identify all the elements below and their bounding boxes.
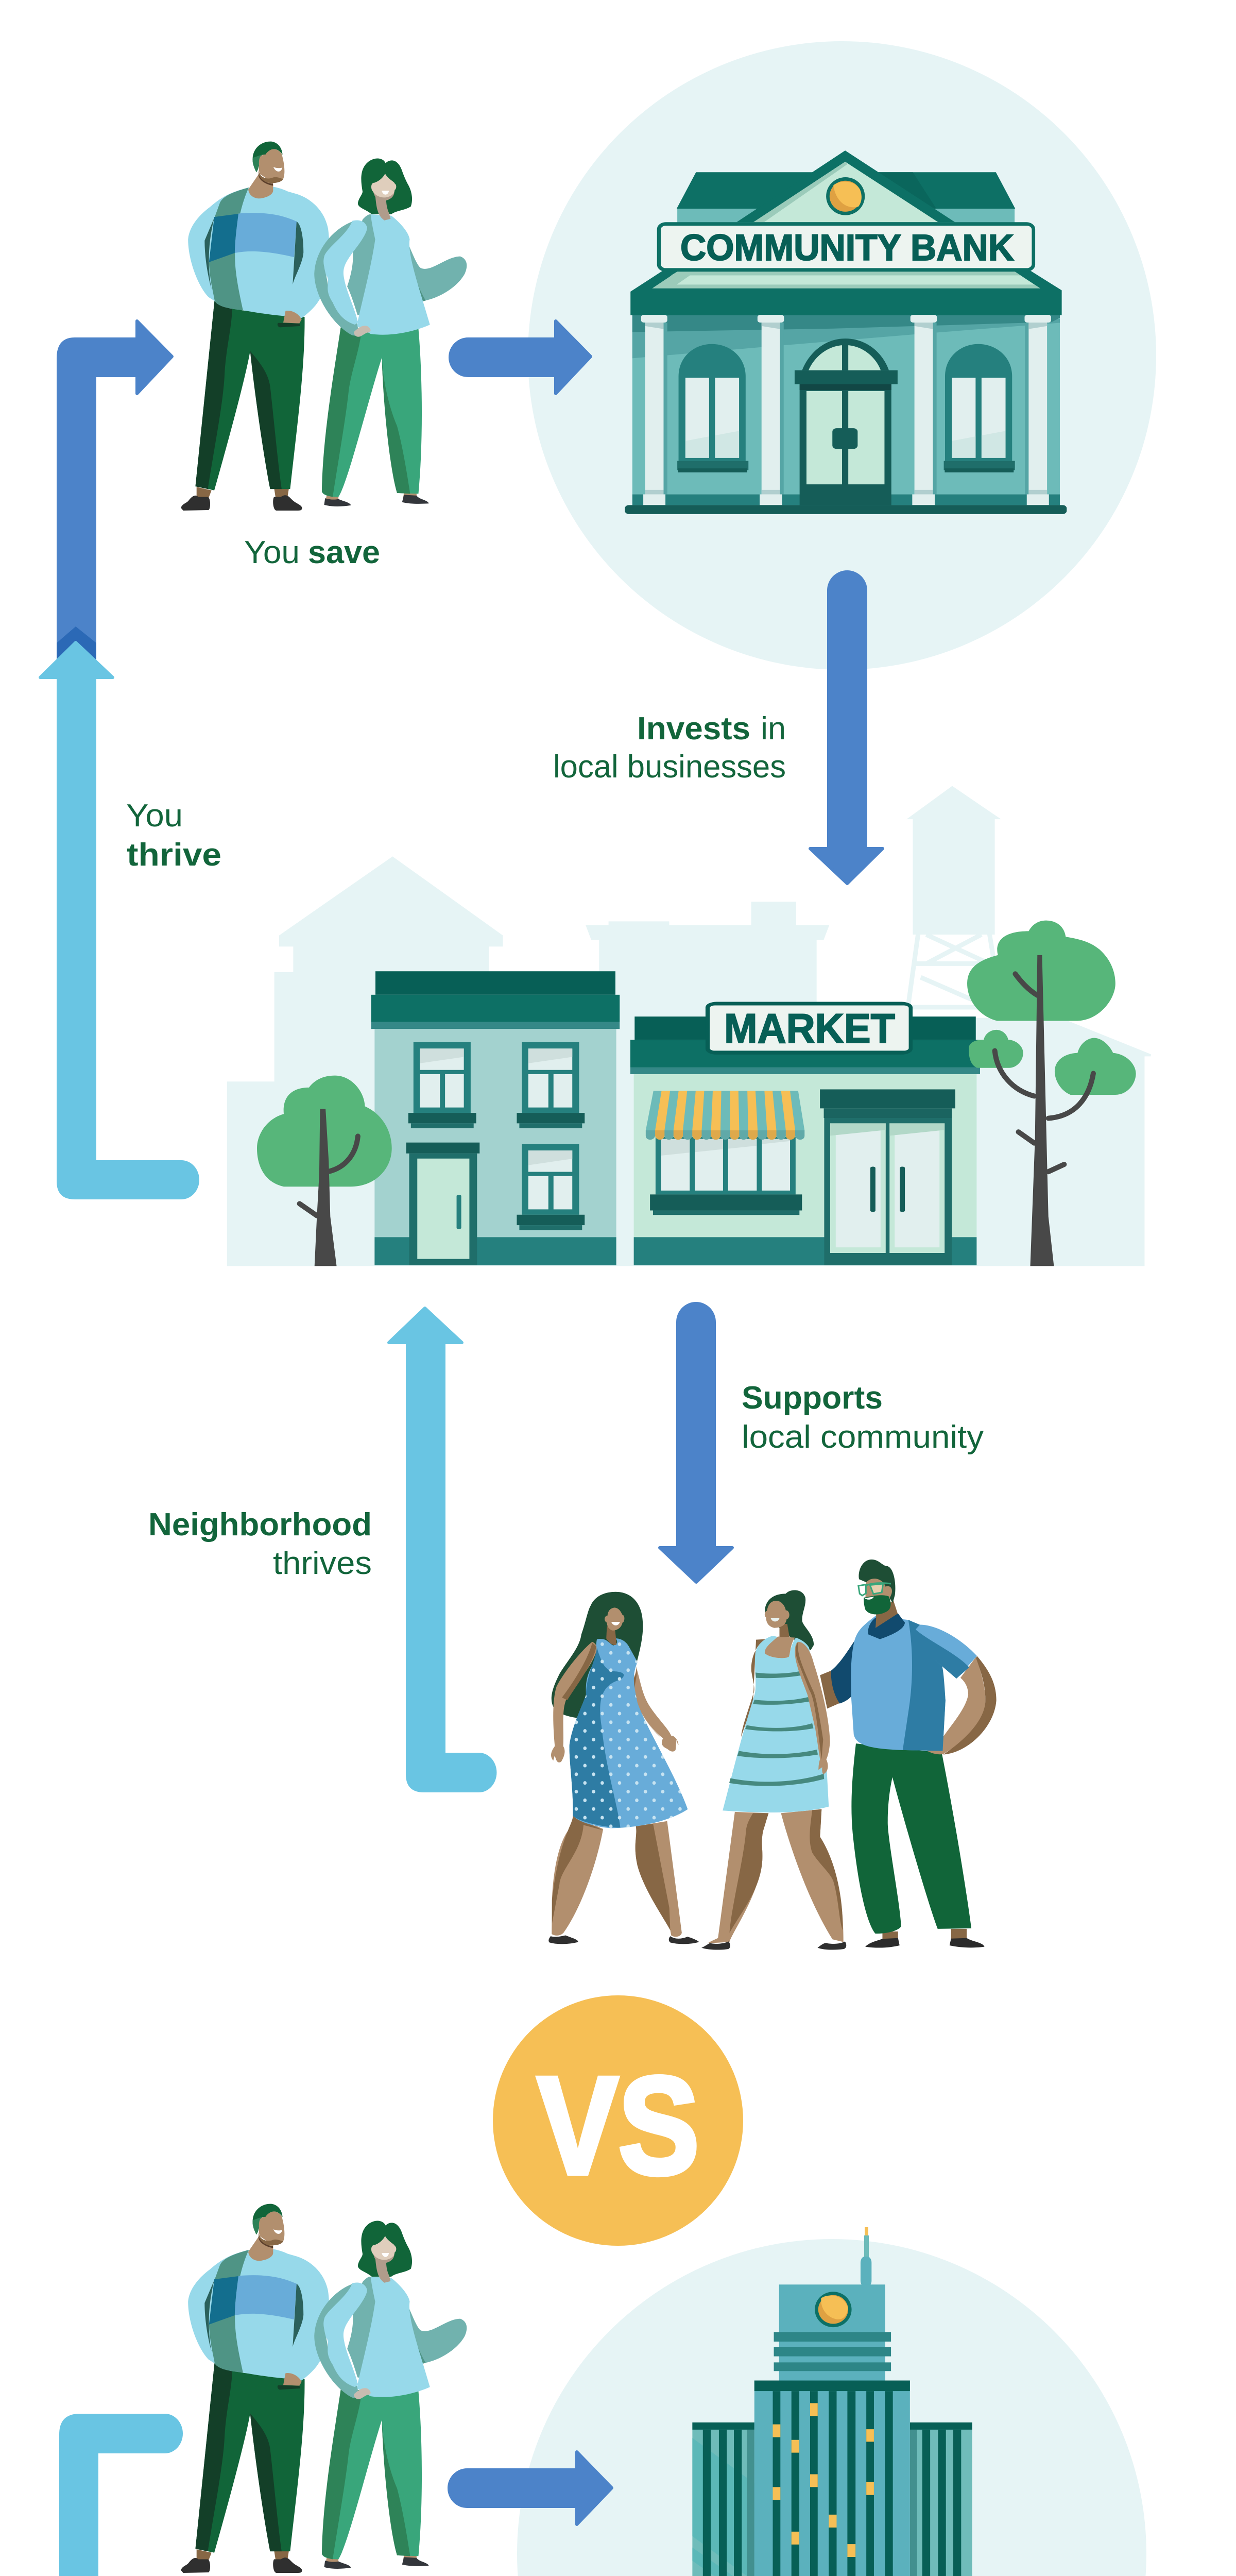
text: You thrive: You	[126, 798, 183, 834]
arrow: supports local community	[660, 1302, 732, 1582]
text: Invests in local businesses	[553, 711, 786, 785]
left arched window	[677, 344, 748, 472]
right arched window	[944, 344, 1015, 472]
townhouse window top left	[408, 1042, 476, 1128]
market sign	[706, 1002, 913, 1055]
text: Invests in local businesses: Invests	[637, 711, 750, 747]
tree: right	[967, 921, 1136, 1266]
central tower	[754, 2381, 910, 2576]
illustration: couple saving (top)	[181, 142, 467, 511]
townhouse window top right	[517, 1042, 585, 1128]
market doors	[820, 1089, 955, 1265]
woman in dotted dress	[548, 1592, 699, 1944]
antenna	[864, 2227, 869, 2259]
illustration: mega bank tower	[660, 2227, 1005, 2576]
tree: left	[257, 1076, 392, 1266]
market	[630, 1002, 980, 1265]
text: You thrive	[126, 798, 221, 873]
text: You save: save	[308, 535, 380, 570]
illustration: three neighbors	[548, 1560, 997, 1950]
arrow: neighborhood thrives	[389, 1308, 496, 1792]
text: Invests in local businesses: local businesses	[553, 749, 786, 785]
right wing	[910, 2422, 972, 2576]
arrow: you thrive (light blue)	[40, 626, 199, 1199]
illustration: couple saving (lower)	[181, 2204, 467, 2573]
illustration: pale town skyline	[227, 786, 1151, 1266]
man in blue shirt	[820, 1560, 997, 1948]
left wing	[692, 2422, 754, 2576]
striped awning	[646, 1091, 804, 1140]
townhouse door	[406, 1143, 479, 1265]
badge: VS: VS	[537, 2048, 699, 2204]
columns	[641, 315, 1051, 505]
arrow: you save to mega bank	[448, 2452, 612, 2524]
illustration: townhouse and market storefront	[371, 971, 980, 1265]
text: You save	[244, 535, 380, 570]
shop window	[650, 1137, 802, 1215]
text: Supports local community: Supports	[742, 1380, 883, 1416]
townhouse window lower right	[517, 1144, 585, 1230]
illustration: community bank building	[625, 150, 1067, 514]
text: Neighborhood thrives	[148, 1507, 372, 1581]
text: MARKET: MARKET	[724, 1006, 895, 1052]
arrow: you save to community bank	[449, 321, 591, 394]
circle: mega bank backdrop	[517, 2239, 1146, 2576]
text: Invests in local businesses: in	[761, 711, 786, 747]
sign: community bank	[657, 222, 1035, 272]
arrow: invests in local businesses	[810, 570, 883, 884]
text: Neighborhood thrives: Neighborhood	[148, 1507, 372, 1543]
text: You thrive: thrive	[127, 837, 221, 873]
townhouse	[371, 971, 620, 1265]
trees	[257, 921, 1136, 1266]
front door	[795, 338, 898, 505]
text: You save: You	[244, 535, 300, 570]
text: Supports local community: local community	[742, 1419, 984, 1455]
text: Supports local community	[742, 1380, 984, 1455]
badge: VS	[493, 1995, 743, 2246]
circle: community bank backdrop	[528, 41, 1156, 670]
woman in striped dress	[701, 1590, 846, 1950]
arrow: you thrive back to you save (dark blue)	[57, 321, 172, 670]
text: COMMUNITY BANK: COMMUNITY BANK	[680, 228, 1014, 268]
arrow: you spend loop (light blue)	[59, 2414, 357, 2576]
text: Neighborhood thrives: thrives	[273, 1546, 372, 1581]
